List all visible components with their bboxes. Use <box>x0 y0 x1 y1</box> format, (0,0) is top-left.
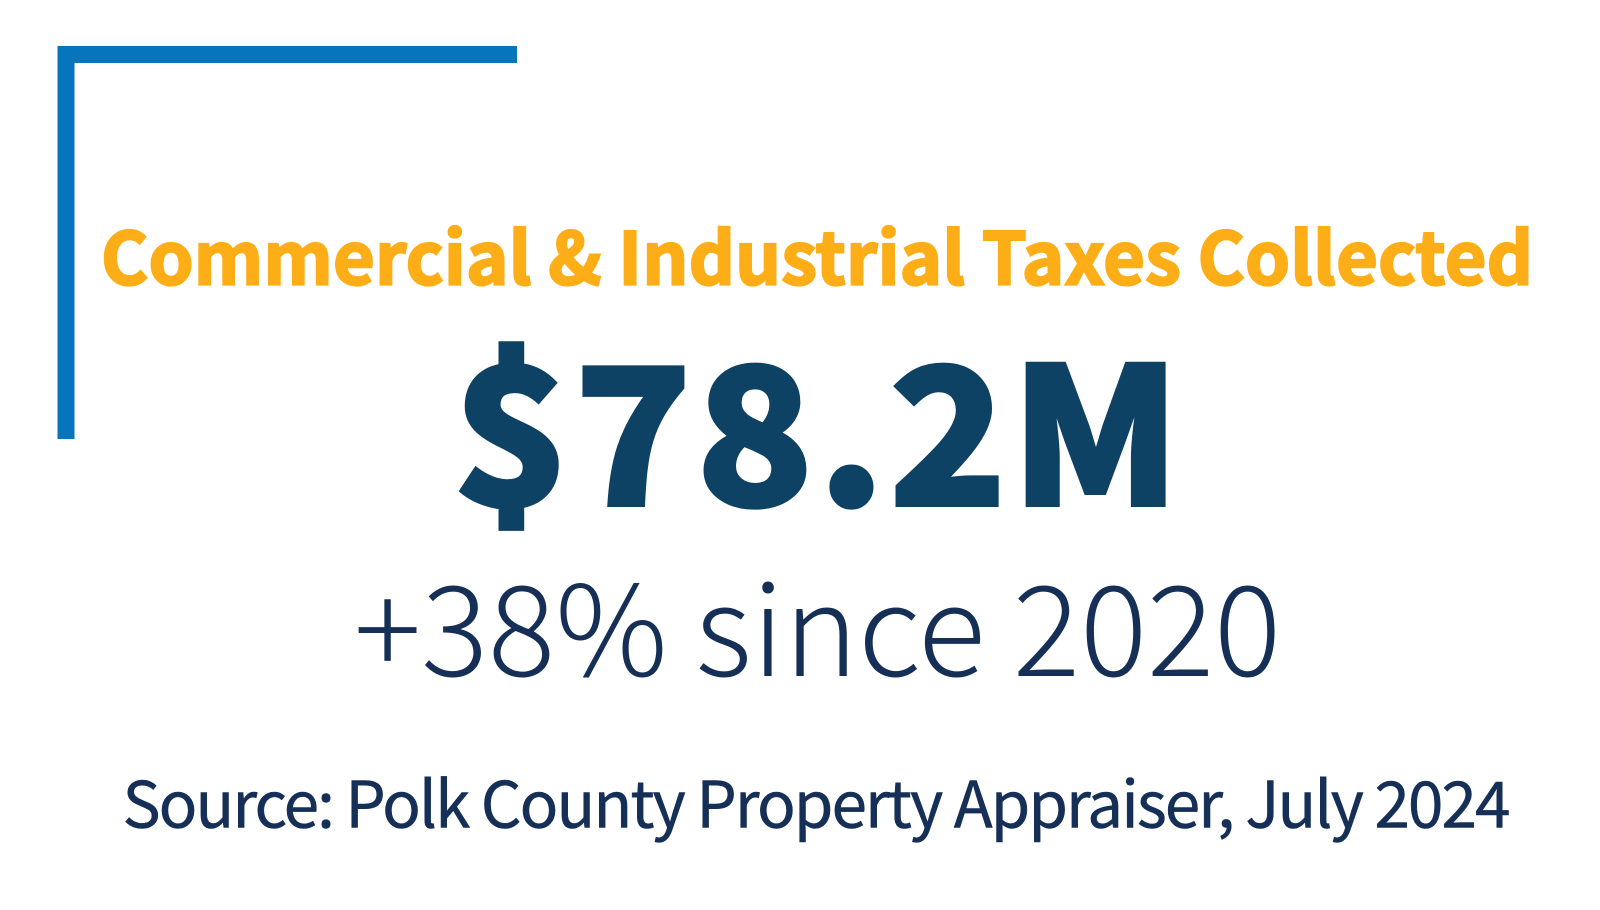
source line: Source: Polk County Property Appraiser, July 2024 <box>122 754 1510 846</box>
title: Commercial & Industrial Taxes Collected <box>101 200 1533 305</box>
corner bracket <box>58 46 517 439</box>
growth subtitle: +38% since 2020 <box>354 531 1281 713</box>
big number: $78.2M <box>452 285 1184 561</box>
